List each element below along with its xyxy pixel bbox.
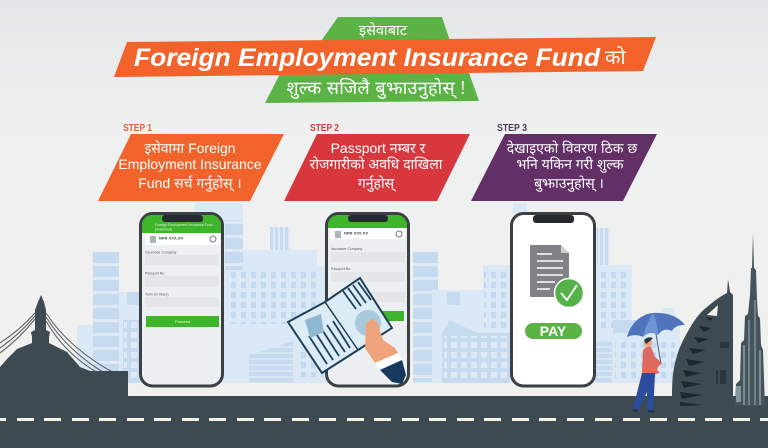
- step 1: Employment Insurance: [118, 156, 262, 172]
- landmark: Burj Khalifa silhouette: [735, 233, 765, 406]
- background city skyline: [77, 203, 680, 383]
- step 2: गर्नुहोस्: [358, 175, 396, 192]
- road with lane markings: [0, 396, 768, 448]
- pay button: PAY: [540, 323, 567, 339]
- step 2: [284, 122, 470, 201]
- landmark: Burj Al Arab silhouette: [672, 279, 733, 407]
- title: top green ribbon: इसेवाबाट: [359, 22, 408, 39]
- icon: passport and pointing hand: [288, 278, 406, 384]
- title: bottom green ribbon: शुल्क सजिलै बुझाउनुहोस् !: [286, 77, 466, 99]
- phone 1: insurance form: Insurance Company: [145, 250, 177, 254]
- step 2: Passport नम्बर र: [331, 140, 426, 156]
- step 3: देखाइएको विवरण ठिक छ: [507, 140, 638, 156]
- phone 1: insurance form: Proceed: [175, 319, 190, 324]
- phone 1: insurance form: (Individual): [155, 228, 172, 232]
- phone 1: insurance form: Foreign Employment Insurance Fund: [155, 223, 213, 227]
- phone 1: insurance form: NPR XXX.XX: [159, 236, 183, 240]
- step 3: STEP 3: [497, 122, 527, 134]
- phone 1: insurance form: Term (in Years): [145, 292, 169, 296]
- title: orange banner: Foreign Employment Insurance Fund: [134, 44, 601, 72]
- phone 2: insurance form: Passport No.: [331, 267, 351, 271]
- title: orange banner: को: [605, 46, 626, 69]
- phone 3: pay screen: [512, 214, 594, 386]
- icon: document with check: [530, 245, 584, 308]
- step 1: Fund सर्च गर्नुहोस् ।: [138, 175, 242, 192]
- step 1: [98, 122, 284, 201]
- step 2: STEP 2: [310, 122, 339, 134]
- person with umbrella: [627, 313, 685, 412]
- step 1: STEP 1: [123, 122, 152, 134]
- phone 2: insurance form: NPR XXX.XX: [344, 230, 368, 236]
- step 3: भनि यकिन गरी शुल्क: [516, 156, 624, 173]
- title: bottom green ribbon: [265, 70, 479, 103]
- phone 2: insurance form: Insurance Company: [331, 247, 363, 251]
- step 1: इसेवामा Foreign: [144, 140, 236, 156]
- pay button: [525, 323, 582, 339]
- phone 1: insurance form: Passport No.: [145, 272, 165, 276]
- step 2: रोजगारीको अवधि दाखिला: [310, 156, 443, 172]
- title: orange banner: [114, 37, 656, 77]
- title: top green ribbon: [319, 17, 451, 44]
- phone 1: insurance form: [140, 214, 222, 386]
- step 3: [471, 122, 657, 201]
- step 3: बुझाउनुहोस् ।: [534, 175, 604, 192]
- landmark: stupa silhouette: [0, 295, 128, 396]
- phone 2: insurance form: [326, 214, 408, 386]
